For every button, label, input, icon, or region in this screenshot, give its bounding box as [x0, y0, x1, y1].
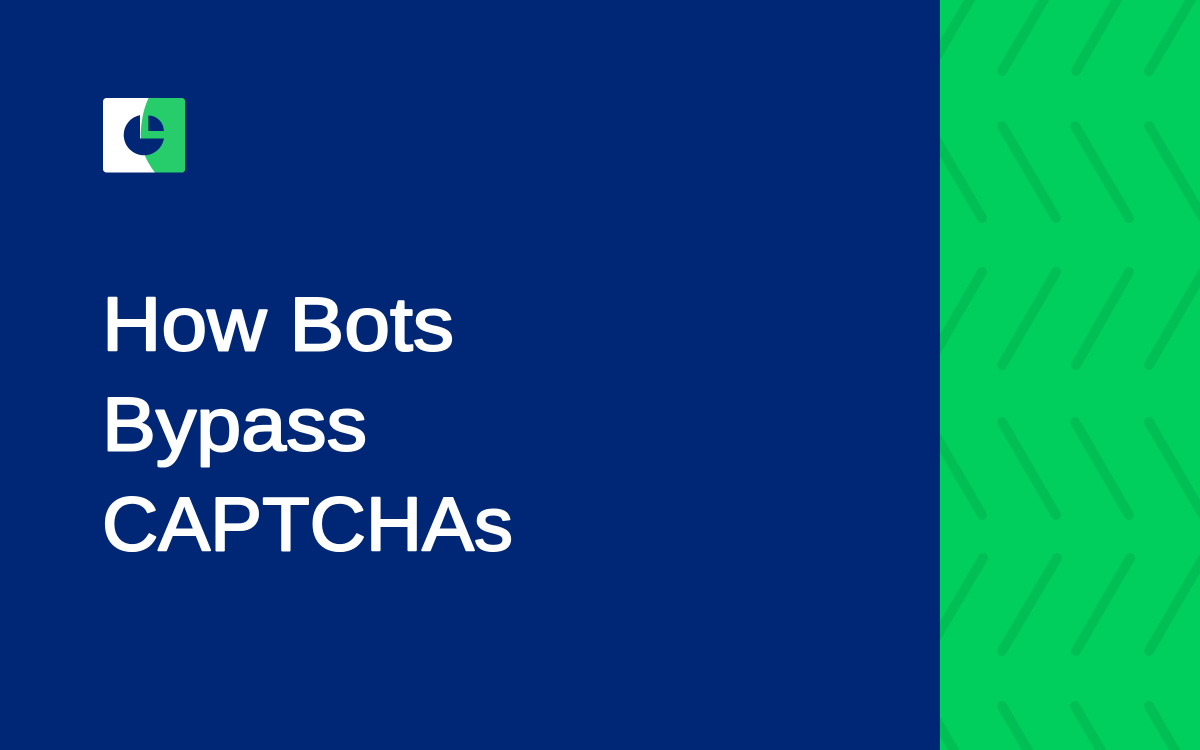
title line 2: Bypass — [102, 382, 367, 468]
title line 1: How Bots — [102, 282, 454, 368]
panel: navy background — [0, 0, 940, 750]
icon: logo — [103, 98, 185, 172]
title line 3: CAPTCHAs — [102, 482, 513, 568]
title — [102, 282, 513, 568]
panel: green patterned strip — [928, 0, 1200, 750]
